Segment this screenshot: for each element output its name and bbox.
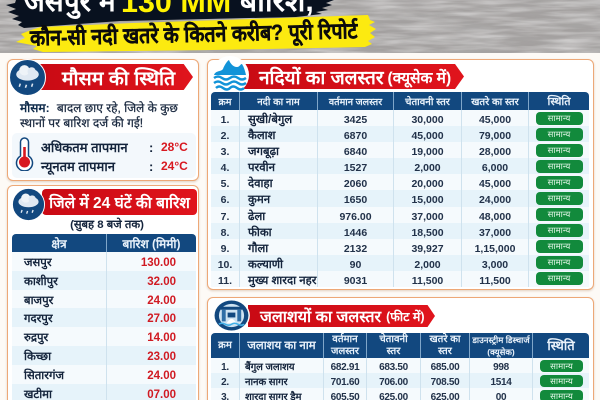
table: rainfall by area: क्षेत्र	[51, 236, 67, 250]
table: rainfall by area: काशीपुर	[24, 276, 58, 288]
banner: weather status heading: मौसम की स्थिति	[62, 68, 175, 90]
table: reservoir levels: 683.50	[379, 362, 408, 373]
table: river levels: सामान्य	[548, 225, 570, 235]
table: river levels: सामान्य	[548, 209, 570, 219]
table: reservoir levels: सामान्य	[550, 360, 573, 370]
table: river levels: सामान्य	[548, 113, 570, 123]
table: reservoir levels: सामान्य	[550, 376, 573, 386]
table: river levels: 15,000	[411, 194, 444, 206]
table: reservoir levels: वर्तमान	[332, 334, 358, 344]
min temperature: न्यूनतम तापमान	[41, 159, 115, 174]
table: river levels: 976.00	[339, 211, 372, 223]
table: river levels: 6,000	[482, 162, 508, 174]
table: river levels: सामान्य	[548, 257, 570, 267]
table: rainfall by area: जसपुर	[24, 257, 52, 269]
min temperature: :	[149, 159, 153, 174]
table: reservoir levels: स्तर	[387, 346, 400, 356]
table: rainfall by area: 23.00	[147, 351, 176, 363]
table: river levels: 3,000	[482, 259, 508, 271]
table: river levels: 2,000	[414, 162, 441, 174]
table: river levels: सामान्य	[548, 161, 570, 171]
banner: reservoir heading: जलाशयों का जलस्तर	[260, 309, 381, 326]
banner: reservoir heading	[248, 305, 435, 327]
table: river levels: नदी का नाम	[257, 96, 300, 108]
table: river levels: 30,000	[411, 114, 444, 126]
table: river levels: 9031	[344, 275, 367, 287]
table: river levels: 19,000	[411, 146, 444, 158]
table: rainfall by area: 27.00	[147, 313, 176, 325]
table: river levels: सामान्य	[548, 177, 570, 187]
table: river levels: सामान्य	[548, 129, 570, 139]
temperature box	[12, 133, 196, 178]
table: river levels: 10.	[218, 259, 232, 271]
panel: 24 hour district rainfall	[7, 185, 199, 400]
table: river levels: जगबूढ़ा	[248, 146, 279, 158]
table: river levels: 90	[350, 259, 361, 271]
table: river levels: 2.	[221, 130, 229, 142]
table: river levels: 39,927	[411, 243, 444, 255]
table: rainfall by area: गदरपुर	[24, 313, 53, 325]
table: reservoir levels: (क्यूसेक)	[487, 346, 515, 356]
table: reservoir levels: बैंगुल जलाशय	[245, 362, 294, 373]
headline text line 1	[24, 0, 314, 19]
table: rainfall by area: 24.00	[147, 295, 176, 307]
table: river levels: 18,500	[411, 227, 444, 239]
table: river levels: 11,500	[479, 275, 511, 287]
icon: water waves	[213, 56, 249, 91]
table: river levels: 6840	[344, 146, 367, 158]
table: reservoir levels: 706.00	[379, 377, 408, 388]
table: river levels: गौला	[248, 243, 268, 255]
header photo: river water	[0, 0, 600, 53]
table: river levels: 79,000	[479, 130, 511, 142]
table: river levels: 2132	[344, 243, 367, 255]
table: reservoir levels: 701.60	[331, 377, 359, 388]
banner: river heading	[240, 64, 464, 89]
table: river levels: 28,000	[479, 146, 511, 158]
table: river levels: सामान्य	[548, 145, 570, 155]
table: river levels: स्थिति	[547, 96, 571, 108]
table: reservoir levels: 685.00	[431, 362, 459, 373]
min temperature: 24°C	[161, 159, 188, 173]
table: river levels: 1446	[344, 227, 367, 239]
table: river levels: 11,500	[412, 275, 443, 287]
table: river levels: सामान्य	[548, 193, 570, 203]
table: river levels: वर्तमान जलस्तर	[329, 96, 382, 108]
table: reservoir levels: 998	[493, 362, 509, 373]
table: river levels: 4.	[221, 162, 229, 174]
banner: river heading: नदियों का जलस्तर	[259, 68, 384, 88]
table: rainfall by area: बाजपुर	[24, 295, 53, 307]
table: reservoir levels: 2.	[221, 377, 229, 388]
table: river levels: 1527	[344, 162, 367, 174]
table: river levels: 1650	[344, 194, 367, 206]
table: rainfall by area	[12, 234, 196, 400]
table: river levels: 48,000	[479, 211, 511, 223]
table: river levels: 11.	[218, 275, 232, 287]
banner: weather status heading	[38, 64, 193, 90]
table: river levels: 45,000	[479, 178, 511, 190]
table: river levels: 5.	[221, 178, 229, 190]
table: reservoir levels	[211, 333, 589, 400]
max temperature	[41, 140, 188, 155]
table: river levels: 45,000	[479, 114, 511, 126]
panel: weather status	[7, 59, 199, 181]
table: reservoir levels: क्रम	[218, 340, 232, 350]
table: rainfall by area: बारिश (मिमी)	[122, 236, 181, 250]
table: river levels: कल्याणी	[248, 259, 283, 271]
table: river levels: सुखी/बेगुल	[248, 114, 292, 126]
icon: rain cloud	[10, 59, 46, 95]
table: river levels: सामान्य	[548, 273, 570, 283]
table: rainfall by area: सितारगंज	[24, 370, 64, 382]
headline: yellow brush banner with text: कौन-सी नदी खतरे के कितने करीब? पूरी रिपोर्ट	[30, 19, 358, 51]
table: reservoir levels: चेतावनी	[379, 334, 408, 344]
table: rainfall by area: 24.00	[147, 370, 176, 382]
table: river levels: 20,000	[411, 178, 444, 190]
table: river levels: 24,000	[479, 194, 511, 206]
table: river levels: खतरे का स्तर	[471, 97, 519, 108]
table: river levels: मुख्य शारदा नहर	[248, 275, 316, 287]
table: river levels: कैलाश	[248, 130, 275, 142]
table: river levels: 7.	[221, 211, 229, 223]
table: river levels: 1,15,000	[475, 243, 515, 255]
banner: river heading: (क्यूसेक में)	[388, 70, 451, 86]
table: reservoir levels: डाउनस्ट्रीम डिस्चार्ज	[472, 334, 530, 344]
table: rainfall by area: रुद्रपुर	[24, 332, 48, 344]
table: reservoir levels: स्थिति	[547, 338, 575, 352]
weather description: मौसम: बादल छाए रहे, जिले के कुछ	[20, 101, 178, 115]
table: reservoir levels: नानक सागर	[245, 377, 288, 388]
table: river levels: क्रम	[218, 96, 231, 108]
table: river levels: फीका	[248, 227, 272, 239]
table: river levels: ढेला	[248, 211, 265, 223]
table: river levels: 9.	[221, 243, 229, 255]
banner: rainfall heading: जिले में 24 घंटें की बारिश	[49, 195, 190, 212]
table: river levels: 3425	[344, 114, 367, 126]
icon: rain cloud	[12, 188, 45, 220]
table: rainfall by area: 32.00	[147, 276, 176, 288]
weather description: स्थानों पर बारिश दर्ज की गई!	[20, 116, 143, 130]
table: river levels: सामान्य	[548, 241, 570, 251]
max temperature: :	[149, 140, 153, 155]
table: river levels: परवीन	[248, 162, 275, 174]
table: reservoir levels: 1.	[221, 362, 229, 373]
table: reservoir levels: स्तर	[438, 346, 452, 356]
icon: thermometer	[16, 137, 34, 171]
table: river levels: 3.	[221, 146, 229, 158]
panel: reservoir water levels	[207, 297, 594, 400]
table: reservoir levels: जलाशय का नाम	[247, 340, 316, 352]
table: river levels: 6870	[344, 130, 367, 142]
table: river levels: 1.	[221, 114, 229, 126]
table: rainfall by area: 130.00	[141, 257, 176, 269]
table: river levels	[211, 92, 589, 288]
table: river levels: चेतावनी स्तर	[405, 97, 450, 108]
panel: river water levels	[207, 59, 594, 290]
weather description	[20, 101, 178, 130]
table: river levels: देवाहा	[248, 178, 273, 190]
table: river levels: 37,000	[479, 227, 511, 239]
table: reservoir levels: 1514	[490, 377, 512, 388]
table: rainfall by area: 14.00	[147, 332, 176, 344]
max temperature: अधिकतम तापमान	[41, 140, 128, 155]
table: river levels: 37,000	[411, 211, 444, 223]
table: river levels: 2,000	[414, 259, 441, 271]
max temperature: 28°C	[161, 140, 188, 154]
min temperature	[40, 159, 188, 175]
table: rainfall by area: किच्छा	[24, 351, 51, 363]
banner: rainfall heading	[42, 189, 197, 215]
table: reservoir levels: जलस्तर	[331, 346, 359, 356]
table: river levels: 2060	[344, 178, 367, 190]
table: reservoir levels: 708.50	[431, 377, 459, 388]
table: reservoir levels: 682.91	[331, 362, 359, 373]
table: reservoir levels: खतरे का	[429, 334, 461, 344]
subtitle: until 8 am: (सुबह 8 बजे तक)	[70, 219, 144, 231]
table: river levels: 45,000	[411, 130, 444, 142]
banner: reservoir heading: (फीट में)	[386, 310, 425, 324]
icon: dam	[214, 300, 250, 330]
table: river levels: 6.	[221, 194, 229, 206]
headline: black brush banner	[6, 0, 334, 28]
table: river levels: कुमन	[248, 194, 270, 206]
table: river levels: 8.	[221, 227, 229, 239]
